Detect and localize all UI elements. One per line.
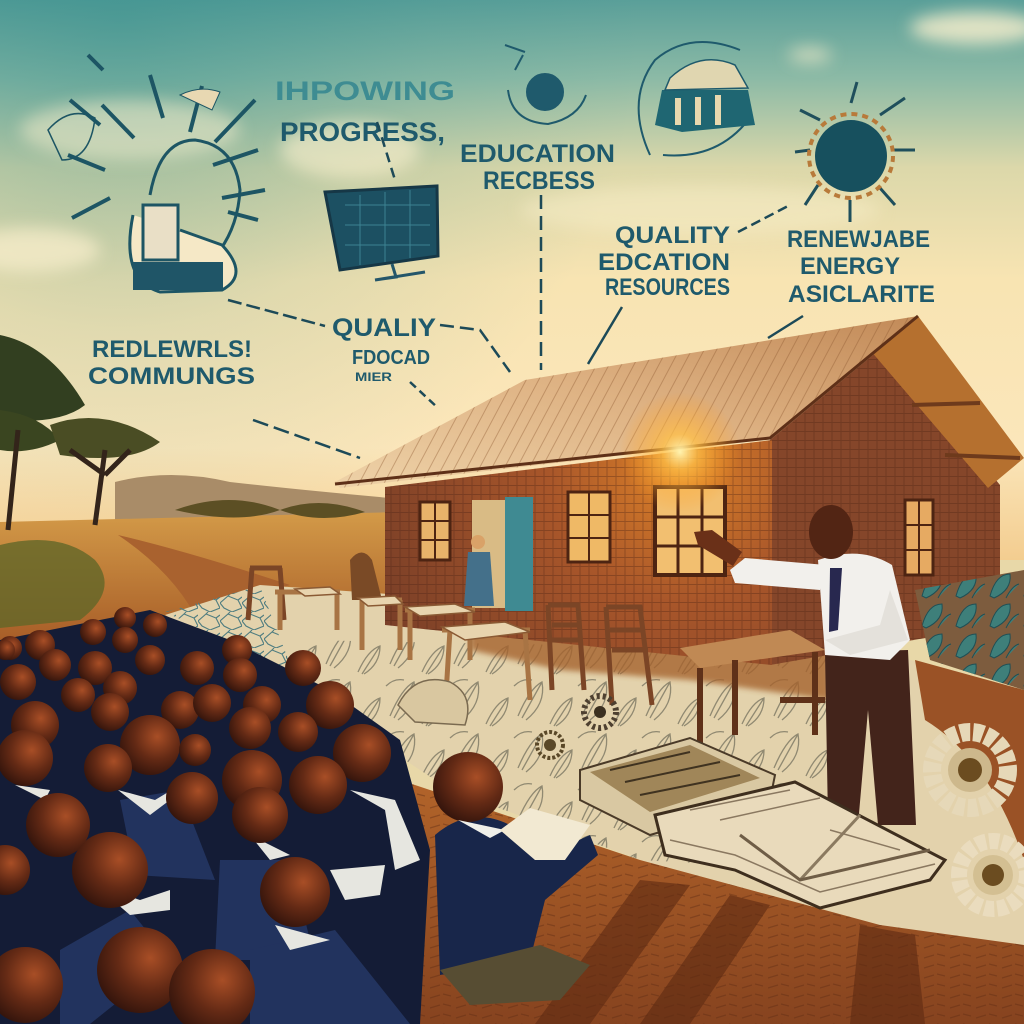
dirt below house: [470, 625, 830, 700]
extended arm: [730, 558, 826, 590]
line 2: RECBESS: [483, 167, 595, 195]
outdoor desks and chairs: [248, 568, 652, 710]
savanna field: [0, 512, 400, 640]
soil right edge: [915, 660, 1024, 860]
left forearm: [825, 590, 908, 655]
flower 3: [584, 696, 616, 728]
line 2: FDOCAD: [352, 347, 430, 369]
roof underside: [870, 316, 1024, 488]
bottom soil: [400, 780, 1024, 1024]
soil texture: [400, 780, 1024, 1024]
flower sketches: [537, 570, 1024, 909]
doorway: [472, 500, 505, 608]
rafters: [912, 403, 1020, 458]
brick texture: [385, 345, 1000, 665]
communities label: [88, 336, 255, 390]
crowd dark mass: [0, 610, 430, 1024]
book box sketch: [580, 738, 775, 835]
education heading: [460, 140, 615, 195]
heading line 1: IHPOWING: [275, 76, 455, 106]
cast shadows: [535, 880, 925, 1024]
sleeping animal sketch: [398, 680, 468, 725]
open book: [655, 782, 945, 908]
dashed connector lines: [228, 122, 803, 458]
uniforms highlight: [60, 790, 410, 1024]
foliage right: [915, 570, 1024, 690]
globe icon: [505, 45, 586, 124]
building sketch icon: [639, 42, 755, 156]
teacher: [694, 505, 916, 825]
white collars: [15, 785, 420, 950]
foliage leaves: [915, 570, 1024, 690]
sky teal tint: [0, 0, 700, 540]
quality education resources label: [598, 222, 730, 301]
grass left: [0, 540, 105, 628]
lightbulb sketch: [48, 55, 265, 292]
desk tops: [295, 587, 530, 640]
trousers: [440, 945, 590, 1005]
flower 1: [932, 732, 1008, 808]
sky background: [0, 0, 1024, 560]
window 3: [655, 487, 725, 575]
bulb: [150, 140, 240, 250]
trousers: [825, 650, 916, 825]
window 4: [905, 500, 933, 575]
line 1: RENEWJABE: [787, 226, 930, 253]
paper: [500, 808, 590, 860]
head: [809, 505, 853, 559]
roof: [335, 316, 918, 488]
line 1: QUALITY: [615, 222, 730, 249]
rays: [68, 55, 265, 220]
line 3: ASICLARITE: [788, 281, 935, 308]
line 1: EDUCATION: [460, 140, 615, 168]
heading line 2: PROGRESS,: [280, 117, 445, 147]
line 2: EDCATION: [598, 249, 730, 276]
head: [433, 752, 503, 822]
window 2: [568, 492, 610, 562]
acacia trees: [0, 335, 365, 530]
book pages: [143, 205, 178, 260]
renewable energy label: [787, 226, 935, 308]
quality label centre: [332, 314, 436, 384]
left doodle: [48, 114, 95, 160]
teacher desk: [680, 630, 825, 745]
window 1: [420, 502, 450, 560]
line 2: ENERGY: [800, 253, 900, 280]
line 3: MIER: [355, 370, 392, 384]
flower 4: [537, 732, 563, 758]
mosaic sketch left: [165, 586, 300, 690]
sun globe icon: [795, 82, 915, 222]
heading: empowering progress: [275, 76, 455, 147]
sweater: [435, 817, 598, 975]
woman in doorway: [464, 535, 494, 606]
sketch ground area: [165, 585, 1024, 950]
door: [505, 497, 533, 611]
children crowd: [0, 607, 430, 1024]
tie: [829, 568, 842, 632]
heads: [0, 607, 391, 1024]
line 3: RESOURCES: [605, 274, 730, 301]
front reading child: [433, 752, 598, 1005]
hand: [694, 530, 742, 566]
sketch leaf texture: [300, 640, 830, 870]
sun glow: [620, 392, 740, 512]
top doodle: [180, 89, 220, 110]
roof edge line: [335, 316, 918, 484]
hands and book: [130, 215, 236, 292]
gable wall: [770, 345, 1000, 665]
shirt: [818, 554, 910, 660]
person at far desk: [350, 552, 382, 600]
book fill: [133, 262, 223, 290]
line 2: COMMUNGS: [88, 363, 255, 390]
line 1: REDLEWRLS!: [92, 336, 252, 363]
distant hills: [115, 475, 390, 530]
house: [335, 316, 1024, 665]
roof ribs: [335, 316, 918, 488]
solar panel monitor icon: [325, 186, 438, 280]
front wall: [385, 440, 772, 665]
line 1: QUALIY: [332, 314, 436, 342]
clouds: [0, 12, 1024, 272]
collar: [458, 820, 505, 838]
dirt path: [118, 535, 290, 615]
flower 2: [959, 841, 1024, 909]
